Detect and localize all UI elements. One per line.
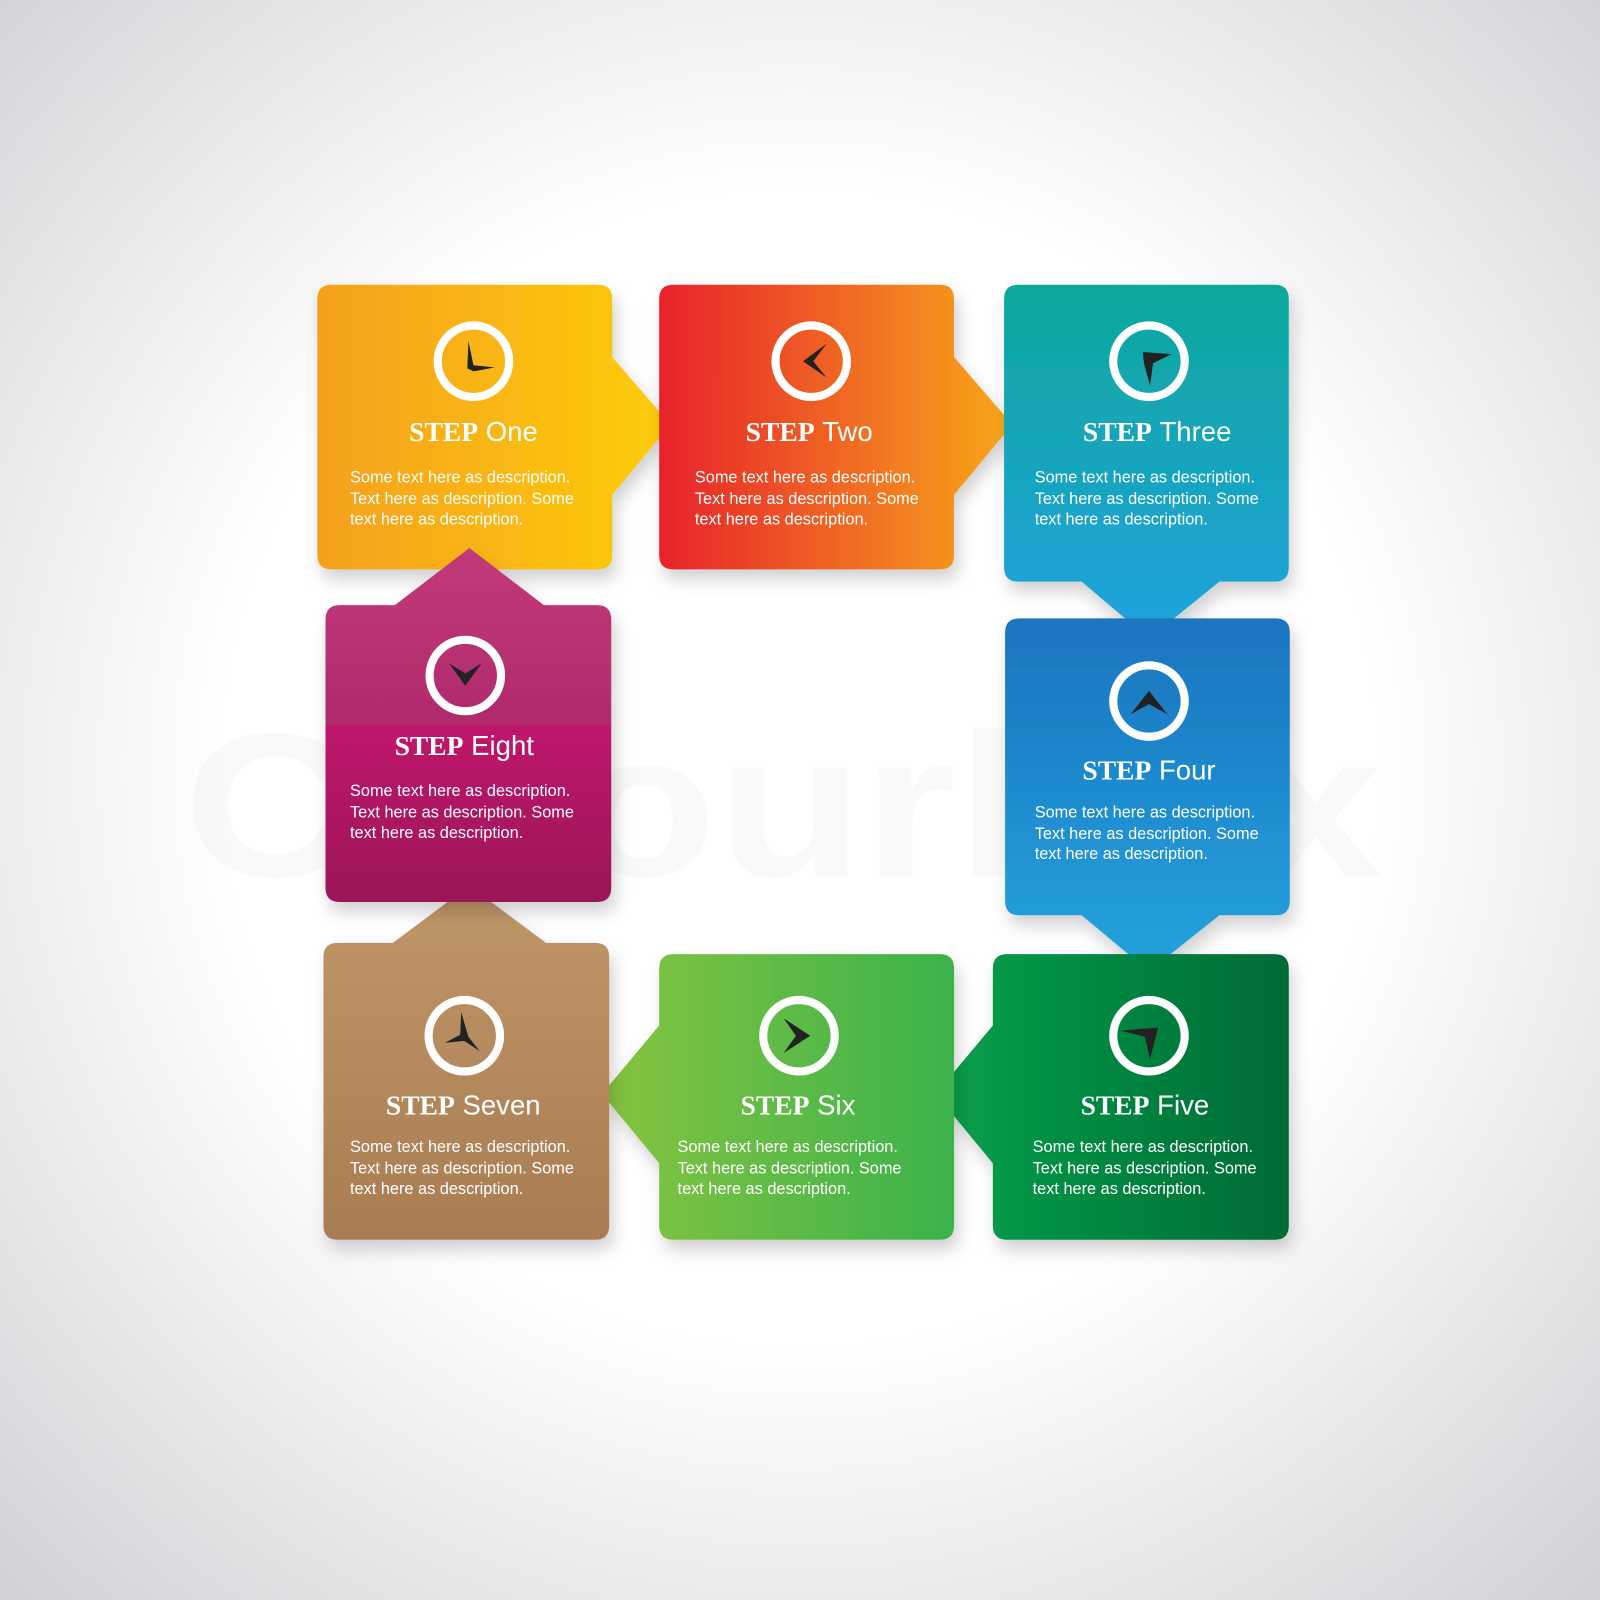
text six: Text here as description. Some <box>678 1159 902 1177</box>
text two: Some text here as description. <box>695 469 915 487</box>
step four <box>1005 618 1290 971</box>
text one: text here as description. <box>350 510 523 528</box>
text five: text here as description. <box>1033 1180 1206 1198</box>
heading five: STEP Five <box>1081 1089 1209 1120</box>
text seven: text here as description. <box>350 1180 523 1198</box>
text seven: Some text here as description. <box>350 1138 570 1156</box>
text eight: Some text here as description. <box>350 782 570 800</box>
heading two: STEP Two <box>746 416 873 447</box>
text six: Some text here as description. <box>678 1138 898 1156</box>
text eight: Text here as description. Some <box>350 803 574 821</box>
text one: Text here as description. Some <box>350 490 574 508</box>
heading three: STEP Three <box>1083 416 1231 447</box>
text three: Text here as description. Some <box>1035 490 1259 508</box>
text two: Text here as description. Some <box>695 490 919 508</box>
text five: Some text here as description. <box>1033 1138 1253 1156</box>
icon: clock two <box>776 326 847 397</box>
step one <box>317 285 670 569</box>
icon: clock one <box>438 326 509 397</box>
text eight: text here as description. <box>350 824 523 842</box>
step seven <box>323 886 609 1240</box>
text five: Text here as description. Some <box>1033 1159 1257 1177</box>
icon: clock three <box>1113 326 1185 397</box>
icon: clock six <box>763 1000 835 1071</box>
icon: clock five <box>1113 1000 1185 1071</box>
step eight <box>326 548 611 902</box>
heading seven: STEP Seven <box>386 1089 541 1120</box>
heading four: STEP Four <box>1082 755 1216 786</box>
step two <box>659 285 1012 569</box>
icon: clock four <box>1113 665 1185 737</box>
heading eight: STEP Eight <box>395 730 534 761</box>
step six <box>602 954 954 1240</box>
step five <box>936 954 1289 1240</box>
step three <box>1004 285 1289 639</box>
icon: clock eight <box>430 640 501 711</box>
text one: Some text here as description. <box>350 469 570 487</box>
heading six: STEP Six <box>741 1089 856 1120</box>
text six: text here as description. <box>678 1180 851 1198</box>
text four: text here as description. <box>1035 845 1208 863</box>
icon: clock seven <box>429 1000 500 1071</box>
text four: Text here as description. Some <box>1035 825 1259 843</box>
text four: Some text here as description. <box>1035 803 1255 821</box>
text three: text here as description. <box>1035 510 1208 528</box>
text two: text here as description. <box>695 510 868 528</box>
text three: Some text here as description. <box>1035 469 1255 487</box>
watermark: Colourbox <box>184 692 1383 920</box>
heading one: STEP One <box>409 416 538 447</box>
text seven: Text here as description. Some <box>350 1159 574 1177</box>
